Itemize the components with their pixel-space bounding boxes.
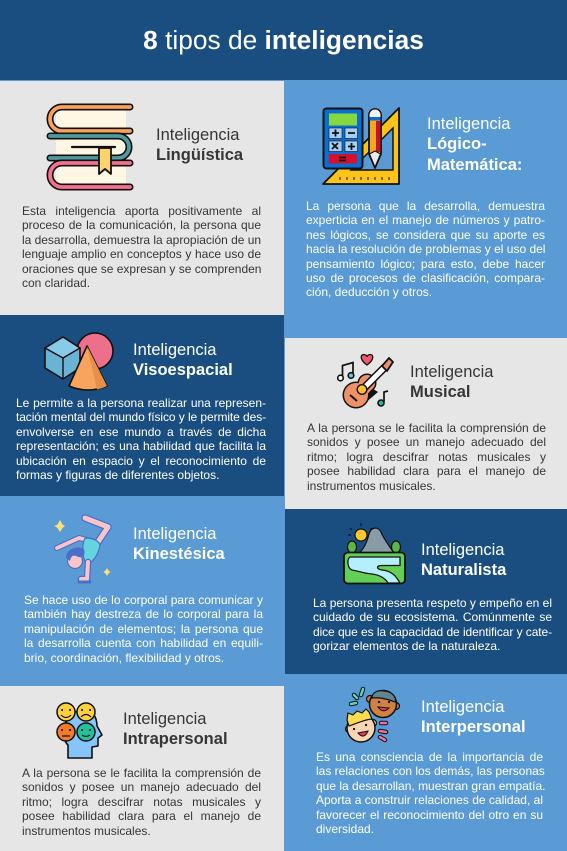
panel: Lógico-Matemática (285, 81, 567, 338)
heading: Lingüística (156, 146, 243, 164)
text block: dice que es la capacidad de identificar y cate- (313, 625, 552, 639)
text block: pensamiento lógico; para esto, debe hacer (306, 257, 545, 271)
heading: Naturalista (421, 561, 506, 579)
text block: ción, deducción y otros. (306, 285, 432, 299)
text block: Le permite a la persona realizar una represen- (16, 396, 266, 410)
text block (22, 204, 261, 290)
text block: Es una consciencia de la importancia de (316, 750, 543, 764)
text block: que la desarrollan, muestran gran empatía. (316, 779, 545, 793)
text block: proceso de la comunicación, la persona que (22, 218, 261, 232)
text block: hacia la resolución de problemas y el uso del (306, 242, 545, 256)
text block: favorecer el reconocimiento del otro en su (316, 808, 543, 822)
text block: Aporta a construir relaciones de calidad, al (316, 793, 543, 807)
text block: posee habilidad clara para el manejo de (307, 464, 546, 478)
heading: Musical (410, 383, 471, 401)
heading (133, 525, 225, 563)
heading (421, 541, 506, 579)
heading: Inteligencia (421, 541, 504, 559)
text block: ritmo; logra descifrar notas musicales y (22, 795, 261, 809)
heading (156, 126, 244, 164)
header band (0, 0, 567, 80)
heading (421, 698, 526, 736)
icon: calculator, ruler and pencil (322, 107, 400, 185)
icon: two smiling people (344, 686, 400, 743)
text block: sonidos y posee un manejo adecuado del (307, 435, 546, 449)
text block: tación mental del mundo físico y le permite des- (16, 410, 266, 424)
text block: oraciones que se expresan y se comprenden (22, 262, 261, 276)
heading: Inteligencia (410, 363, 493, 381)
text block: representación; es una habilidad que facilita la (16, 439, 266, 453)
text block (307, 421, 546, 493)
heading: Lógico- (427, 135, 487, 153)
text block: diversidad. (316, 822, 374, 836)
text block: Se hace uso de lo corporal para comunicar y (24, 593, 263, 607)
heading: Inteligencia (427, 115, 510, 133)
text block (313, 596, 552, 653)
text block: instrumentos musicales. (22, 824, 151, 838)
heading: Visoespacial (133, 361, 233, 379)
icon: cube, sphere and cone (44, 332, 114, 391)
text block: gorizar elementos de la naturaleza. (313, 639, 500, 653)
text block: la desarrolla, demuestra la apropiación de un (22, 233, 261, 247)
title: 8 tipos de inteligencias (143, 25, 424, 55)
panel: Interpersonal (285, 674, 567, 851)
icon: landscape with sun, mountain and river (343, 523, 406, 584)
heading: Inteligencia (123, 710, 206, 728)
heading: Matemática: (427, 156, 522, 174)
panel: Lingüística (0, 81, 284, 315)
heading: Interpersonal (421, 718, 526, 736)
heading: Intrapersonal (123, 730, 228, 748)
text block: con claridad. (22, 276, 90, 290)
text block: formas y figuras de diferentes objetos. (16, 468, 219, 482)
heading: Kinestésica (133, 545, 225, 563)
heading: Inteligencia (156, 126, 239, 144)
icon: head with emotion faces (56, 702, 103, 759)
text block: posee habilidad clara para el manejo de (22, 809, 261, 823)
heading (133, 341, 233, 379)
text block (22, 766, 261, 838)
panel: Visoespacial (0, 315, 284, 496)
text block: instrumentos musicales. (307, 479, 436, 493)
text block: A la persona se le facilita la comprensión de (22, 766, 261, 780)
icon: gymnast doing a handstand (54, 514, 112, 584)
text block: manipulación de elementos; la persona que (24, 622, 263, 636)
icon: guitar with notes and heart (336, 354, 394, 408)
text block: la desarrolla cuenta con habilidad en equili- (24, 636, 263, 650)
text block: Esta inteligencia aporta positivamente al (22, 204, 261, 218)
heading (410, 363, 494, 401)
panel: Intrapersonal (0, 686, 284, 851)
text block (306, 199, 546, 299)
text block: A la persona se le facilita la comprensión de (307, 421, 546, 435)
panel: Kinestésica (0, 496, 284, 686)
text block: brio, coordinación, flexibilidad y otros. (24, 651, 224, 665)
text block: también hay destreza de lo corporal para la (24, 607, 263, 621)
text block: lenguaje amplio en conceptos y hace uso de (22, 247, 261, 261)
heading (427, 115, 522, 174)
text block (316, 750, 545, 836)
text block: ritmo; logra descifrar notas musicales y (307, 450, 546, 464)
text block: envolverse en ese mundo a través de dicha (16, 425, 266, 439)
heading: Inteligencia (133, 341, 216, 359)
text block: ubicación en espacio y el reconocimiento de (16, 454, 266, 468)
text block: La persona que la desarrolla, demuestra (306, 199, 545, 213)
text block: uso de procesos de clasificación, compara- (306, 271, 545, 285)
text block: nes lógicos, se considera que su aporte es (306, 228, 545, 242)
text block (16, 396, 266, 482)
heading: Inteligencia (421, 698, 504, 716)
text block: experticia en el manejo de números y patro- (306, 213, 545, 227)
heading: Inteligencia (133, 525, 216, 543)
heading (123, 710, 228, 748)
text block: La persona presenta respeto y empeño en el (313, 596, 552, 610)
text block: sonidos y posee un manejo adecuado del (22, 780, 261, 794)
panel: Musical (285, 338, 567, 509)
icon: stack of books (46, 104, 134, 190)
panel: Naturalista (285, 509, 567, 674)
text block (24, 593, 264, 665)
text block: las relaciones con los demás, las personas (316, 764, 545, 778)
text block: cuidado de su ecosistema. Comúnmente se (313, 610, 552, 624)
